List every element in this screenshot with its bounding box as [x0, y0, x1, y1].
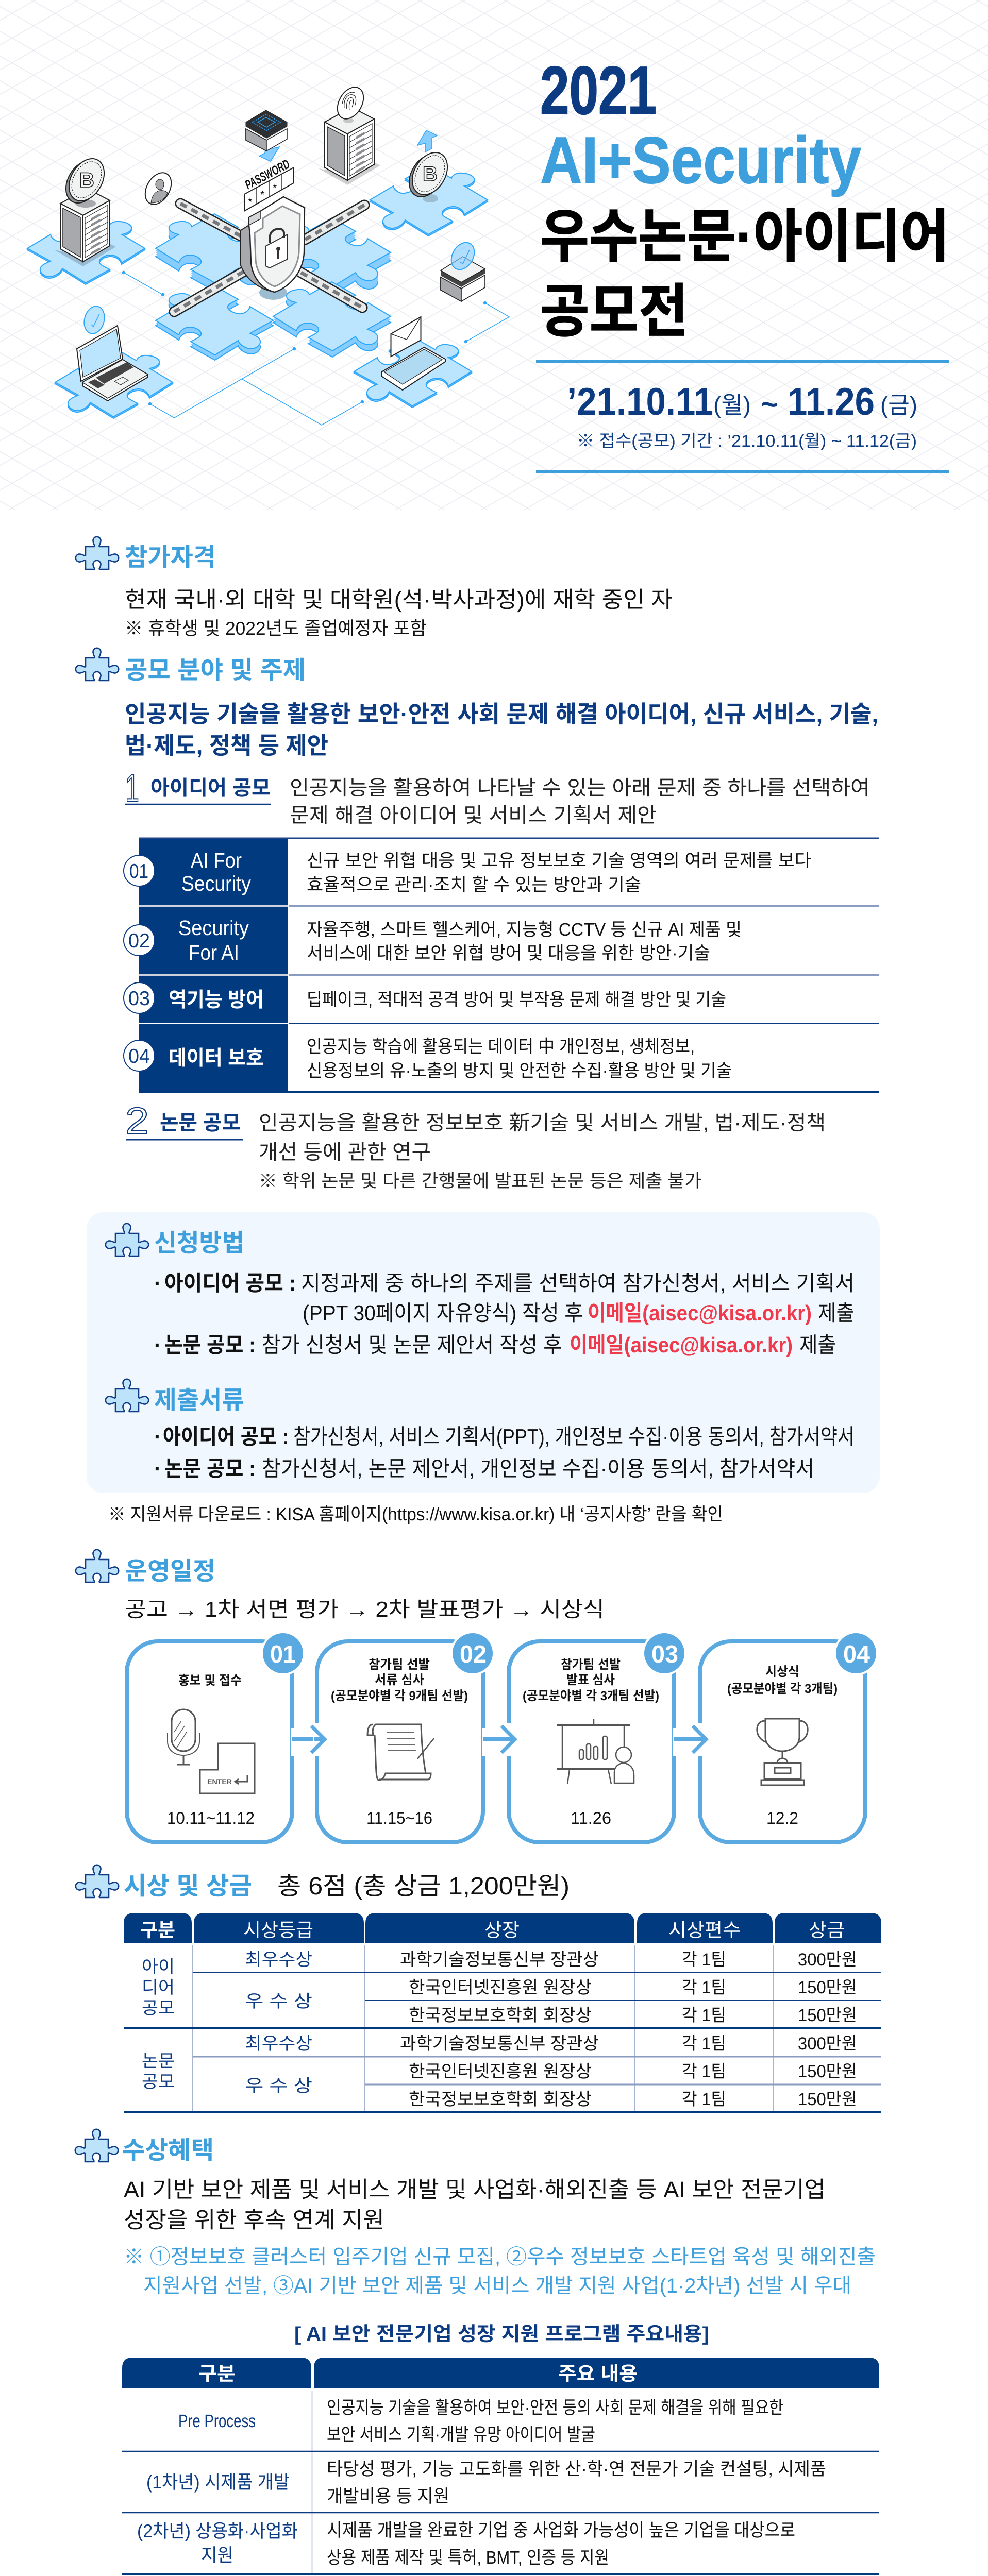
card 01 [127, 1631, 305, 1842]
row 01: Security [181, 872, 251, 895]
row: first year: 타당성 평가, 기능 고도화를 위한 산·학·연 전문가 기술 컨설팅, 시제품 [327, 2459, 826, 2479]
documents: idea contest: · [154, 1425, 161, 1449]
card 03: (공모분야별 각 3개팀 선발) [523, 1689, 659, 1703]
benefit note [124, 2246, 876, 2297]
icon: trophy [757, 1719, 808, 1785]
row: second year: 시제품 개발을 완료한 기업 중 사업화 가능성이 높은 기업을 대상으로 [327, 2520, 795, 2540]
row: pre process: 인공지능 기술을 활용하여 보안·안전 등의 사회 문제 해결을 위해 필요한 [327, 2398, 783, 2418]
table award grade column: 우 수 상 [245, 1992, 312, 2011]
heading: submission documents: 제출서류 [154, 1387, 244, 1414]
bitcoin left: B [79, 169, 94, 192]
table certificate column: 한국인터넷진흥원 원장상 [409, 1978, 592, 1997]
row: second year: 지원 [201, 2545, 233, 2566]
awards table [124, 1913, 881, 2112]
paper contest label [125, 1100, 243, 1142]
title: AI+Security: AI+Security [540, 124, 861, 197]
icon: presentation board [557, 1719, 634, 1784]
row 03: 딥페이크, 적대적 공격 방어 및 부작용 문제 해결 방안 및 기술 [307, 990, 726, 1010]
row: pre process: Pre Process [178, 2411, 256, 2431]
icon: puzzle [76, 537, 119, 569]
program table title: [ AI 보안 전문기업 성장 지원 프로그램 주요내용] [294, 2324, 709, 2345]
benefit note: 지원사업 선발, ③AI 기반 보안 제품 및 서비스 개발 지원 사업(1·2차년) 선발 시 우대 [143, 2275, 851, 2297]
row: second year: 상용 제품 제작 및 특허, BMT, 인증 등 지원 [327, 2548, 609, 2568]
bitcoin right with arrow [402, 130, 455, 203]
table header [122, 2358, 879, 2388]
row: pre process: 보안 서비스 기획·개발 유망 아이디어 발굴 [327, 2425, 595, 2445]
card 03: 참가팀 선발 [561, 1657, 621, 1672]
table grid [122, 2391, 879, 2574]
application: paper contest: · [154, 1333, 161, 1357]
benefit description [124, 2177, 826, 2233]
table certificate column: 과학기술정보통신부 장관상 [400, 1950, 599, 1970]
table left column [142, 1957, 175, 2092]
documents: paper contest: · [154, 1456, 161, 1481]
password box [243, 157, 294, 211]
card 03: 발표 심사 [566, 1673, 615, 1687]
table count column: 각 1팀 [682, 2006, 726, 2025]
row 02: 서비스에 대한 보안 위협 방어 및 대응을 위한 방안·기술 [307, 943, 710, 963]
benefit note: ※ ①정보보호 클러스터 입주기업 신규 모집, ②우수 정보보호 스타트업 육성 및 해외진출 [124, 2246, 876, 2268]
documents: paper contest: 논문 공모 : [164, 1456, 256, 1481]
documents: idea contest: 참가신청서, 서비스 기획서(PPT), 개인정보 수집·이용 동의서, 참가서약서 [293, 1425, 855, 1449]
divider top [536, 360, 949, 363]
row 01: 01 [129, 860, 148, 883]
table left column: 공모 [142, 1998, 175, 2018]
schedule flow text: 공고 → 1차 서면 평가 → 2차 발표평가 → 시상식 [125, 1597, 605, 1621]
profile coin [140, 168, 177, 209]
row 03: 03 [128, 988, 150, 1010]
table header: 상금 [809, 1920, 845, 1941]
benefit description: AI 기반 보안 제품 및 서비스 개발 및 사업화·해외진출 등 AI 보안 전문기업 [124, 2177, 826, 2202]
application: idea contest: 이메일(aisec@kisa.or.kr) [588, 1301, 812, 1325]
row 04 [124, 1037, 732, 1081]
table count column [682, 1950, 726, 2109]
chains [174, 204, 364, 312]
documents: paper contest: 참가신청서, 논문 제안서, 개인정보 수집·이용 동의서, 참가서약서 [262, 1456, 814, 1481]
benefit description: 성장을 위한 후속 연계 지원 [124, 2208, 384, 2233]
panel: application and documents [87, 1212, 880, 1493]
eligibility note: ※ 휴학생 및 2022년도 졸업예정자 포함 [125, 618, 427, 639]
table count column: 각 1팀 [682, 1950, 726, 1970]
row 02: Security [178, 916, 249, 940]
table left column: 아이 [142, 1957, 175, 1977]
table header: 구분 [140, 1920, 175, 1941]
card 02: 11.15~16 [366, 1808, 432, 1827]
heading: 참가자격 [125, 544, 216, 571]
card 03: 03 [651, 1641, 678, 1668]
table left column: 논문 [142, 2052, 175, 2071]
illustration: security puzzle [27, 82, 509, 425]
AI chip block [246, 110, 287, 161]
table left column: 공모 [142, 2072, 175, 2092]
puzzle piece: server left [27, 214, 145, 284]
table header: 시상등급 [243, 1920, 313, 1941]
table award grade column: 최우수상 [245, 2034, 312, 2054]
paper contest label: 2 [125, 1100, 149, 1142]
title: contest name line 2: 공모전 [540, 279, 688, 344]
row: second year: (2차년) 상용화·사업화 [137, 2520, 298, 2541]
paper contest description [259, 1112, 826, 1191]
shield with padlock [241, 197, 305, 300]
table prize column: 150만원 [798, 2062, 857, 2081]
icon: mic and enter key: ENTER [207, 1777, 232, 1786]
table award grade column [245, 1950, 312, 2096]
table header: 시상편수 [668, 1920, 741, 1941]
card 02: 02 [460, 1641, 487, 1668]
paper contest label: 논문 공모 [160, 1112, 241, 1134]
arrow 2 [482, 1728, 509, 1756]
row 04: 신용정보의 유·노출의 방지 및 안전한 수집·활용 방안 및 기술 [307, 1061, 732, 1081]
application: paper contest: 참가 신청서 및 논문 제안서 작성 후 [262, 1333, 562, 1357]
paper contest description: 개선 등에 관한 연구 [259, 1141, 431, 1164]
idea contest description [290, 777, 870, 827]
heading: 운영일정 [125, 1558, 215, 1585]
submission period note: ※ 접수(공모) 기간 : ’21.10.11(월) ~ 11.12(금) [577, 431, 917, 450]
table prize column [798, 1950, 857, 2109]
row 03 [124, 982, 726, 1013]
table header: 주요 내용 [558, 2363, 638, 2384]
icon: puzzle [75, 2129, 118, 2162]
table header: 상장 [484, 1920, 520, 1941]
table count column: 각 1팀 [682, 1978, 726, 1997]
card 01: 01 [270, 1641, 296, 1668]
idea contest label: 아이디어 공모 [150, 777, 271, 800]
table award grade column: 우 수 상 [245, 2076, 312, 2096]
password box: * [273, 181, 277, 194]
card 04: 시상식 [765, 1665, 799, 1679]
divider bottom [536, 470, 949, 473]
table prize column: 150만원 [798, 2090, 857, 2109]
row: pre process [178, 2398, 783, 2445]
application: idea contest: 제출 [818, 1301, 855, 1325]
card 03 [501, 1631, 686, 1842]
award total: 총 6점 (총 상금 1,200만원) [277, 1873, 570, 1900]
table header [124, 1913, 881, 1943]
row 01: AI For [191, 849, 242, 872]
table grid [124, 1945, 881, 2112]
contest dates [567, 380, 917, 423]
title block [540, 53, 949, 344]
card 01: 홍보 및 접수 [178, 1673, 242, 1688]
row 02: 02 [128, 930, 150, 952]
card 03: 11.26 [571, 1808, 611, 1827]
row 01: 효율적으로 관리·조치 할 수 있는 방안과 기술 [307, 875, 641, 895]
application: paper contest: 논문 공모 : [164, 1333, 256, 1357]
row 01: 신규 보안 위협 대응 및 고유 정보보호 기술 영역의 여러 문제를 보다 [307, 851, 811, 871]
row 02: 자율주행, 스마트 헬스케어, 지능형 CCTV 등 신규 AI 제품 및 [307, 920, 742, 940]
connector lines [123, 271, 509, 425]
server left [54, 189, 116, 266]
row 04: 04 [128, 1045, 150, 1067]
puzzle piece: phone [354, 337, 472, 408]
row 02 [124, 916, 742, 964]
section: schedule [76, 1550, 878, 1842]
application: paper contest: 제출 [799, 1333, 836, 1357]
icon: scroll and pen [367, 1724, 434, 1780]
puzzle piece: coin right [370, 165, 488, 236]
icon: puzzle [106, 1224, 148, 1256]
table prize column: 150만원 [798, 2006, 857, 2025]
row 04: 인공지능 학습에 활용되는 데이터 中 개인정보, 생체정보, [307, 1037, 695, 1057]
topic summary [125, 701, 878, 759]
bitcoin left [59, 152, 111, 209]
contest dates: ~ [761, 387, 778, 421]
topic summary: 법·제도, 정책 등 제안 [125, 732, 328, 759]
application: idea contest: 아이디어 공모 : [164, 1271, 296, 1295]
table certificate column: 한국정보보호학회 회장상 [409, 2090, 592, 2109]
contest dates: (금) [880, 392, 917, 418]
table count column: 각 1팀 [682, 2090, 726, 2109]
title: year: 2021 [540, 53, 657, 128]
section: eligibility [76, 537, 673, 639]
program table [122, 2358, 879, 2574]
title: contest name line 1: 우수논문·아이디어 [540, 205, 949, 269]
arrow 1 [291, 1728, 323, 1756]
central puzzle cluster [156, 214, 391, 360]
server top [319, 107, 380, 185]
icon: mic and enter key [168, 1709, 255, 1793]
password box: * [248, 195, 253, 208]
documents: idea contest: 아이디어 공모 : [163, 1425, 289, 1449]
table count column: 각 1팀 [682, 2034, 726, 2054]
row: first year: (1차년) 시제품 개발 [146, 2471, 290, 2493]
phone and envelope [381, 317, 445, 390]
row 04: 데이터 보호 [169, 1047, 264, 1070]
application: idea contest: · [154, 1271, 161, 1295]
row: first year: 개발비용 등 지원 [327, 2486, 449, 2506]
table certificate column: 한국정보보호학회 회장상 [409, 2006, 592, 2025]
paper contest description: ※ 학위 논문 및 다른 간행물에 발표된 논문 등은 제출 불가 [259, 1171, 701, 1191]
header background lattice [0, 0, 988, 510]
application: idea contest [154, 1271, 855, 1325]
row 02: For AI [189, 941, 239, 964]
puzzle piece: laptop [55, 348, 173, 418]
idea contest label [125, 767, 271, 810]
password box: PASSWORD [243, 157, 292, 192]
table prize column: 150만원 [798, 1978, 857, 1997]
heading: 공모 분야 및 주제 [125, 657, 306, 684]
icon: puzzle [76, 648, 119, 681]
download note: ※ 지원서류 다운로드 : KISA 홈페이지(https://www.kisa.or.kr) 내 ‘공지사항’ 란을 확인 [108, 1504, 723, 1524]
table header: 구분 [198, 2363, 236, 2384]
card 04: (공모분야별 각 3개팀) [727, 1682, 838, 1696]
table award grade column: 최우수상 [245, 1950, 312, 1970]
topic table [124, 838, 879, 1092]
table prize column: 300만원 [798, 1950, 857, 1970]
table certificate column: 한국인터넷진흥원 원장상 [409, 2062, 592, 2081]
icon: puzzle [106, 1379, 148, 1412]
icon: puzzle [76, 1550, 119, 1582]
table certificate column [400, 1950, 599, 2109]
row 03: 역기능 방어 [169, 989, 264, 1011]
table certificate column: 과학기술정보통신부 장관상 [400, 2034, 599, 2054]
card 04: 04 [843, 1641, 870, 1668]
arrow 3 [673, 1728, 700, 1756]
row: first year [146, 2459, 826, 2506]
card 02: (공모분야별 각 9개팀 선발) [331, 1689, 468, 1703]
card 01: 10.11~11.12 [167, 1808, 255, 1827]
check box device [441, 239, 485, 301]
contest dates: (월) [713, 392, 751, 418]
section: benefits [75, 2129, 879, 2574]
idea contest description: 문제 해결 아이디어 및 서비스 기획서 제안 [290, 804, 657, 827]
paper contest description: 인공지능을 활용한 정보보호 新기술 및 서비스 개발, 법·제도·정책 [259, 1112, 826, 1134]
card 02 [311, 1631, 495, 1842]
password box: * [260, 188, 265, 201]
idea contest description: 인공지능을 활용하여 나타날 수 있는 아래 문제 중 하나를 선택하여 [290, 777, 870, 800]
contest dates: 11.26 [788, 380, 875, 423]
application: idea contest: (PPT 30페이지 자유양식) 작성 후 [303, 1301, 583, 1325]
row 01 [124, 849, 811, 895]
row: second year [137, 2520, 795, 2568]
icon: puzzle [76, 1865, 119, 1897]
card 04: 12.2 [766, 1808, 798, 1827]
topic summary: 인공지능 기술을 활용한 보안·안전 사회 문제 해결 아이디어, 신규 서비스, 기술, [125, 701, 878, 727]
section: fields and topics [76, 648, 879, 1191]
application: idea contest: 지정과제 중 하나의 주제를 선택하여 참가신청서, 서비스 기획서 [301, 1271, 855, 1295]
application: paper contest [154, 1333, 836, 1357]
heading: 수상혜택 [122, 2137, 214, 2164]
card 02: 서류 심사 [375, 1673, 424, 1687]
bitcoin right with arrow: B [423, 163, 438, 185]
eligibility text: 현재 국내·외 대학 및 대학원(석·박사과정)에 재학 중인 자 [125, 587, 673, 613]
table count column: 각 1팀 [682, 2062, 726, 2081]
table prize column: 300만원 [798, 2034, 857, 2054]
card 02: 참가팀 선발 [369, 1657, 430, 1672]
heading: application method: 신청방법 [154, 1230, 244, 1257]
application: paper contest: 이메일(aisec@kisa.or.kr) [570, 1333, 793, 1357]
fingerprint coin [332, 82, 369, 124]
contest dates: ’21.10.11 [567, 380, 713, 423]
table left column: 디어 [142, 1978, 175, 1997]
laptop with check coin [77, 304, 148, 401]
section: awards [76, 1865, 881, 2112]
card 04 [693, 1631, 878, 1842]
idea contest label: 1 [125, 767, 139, 810]
heading: 시상 및 상금 [124, 1873, 252, 1900]
